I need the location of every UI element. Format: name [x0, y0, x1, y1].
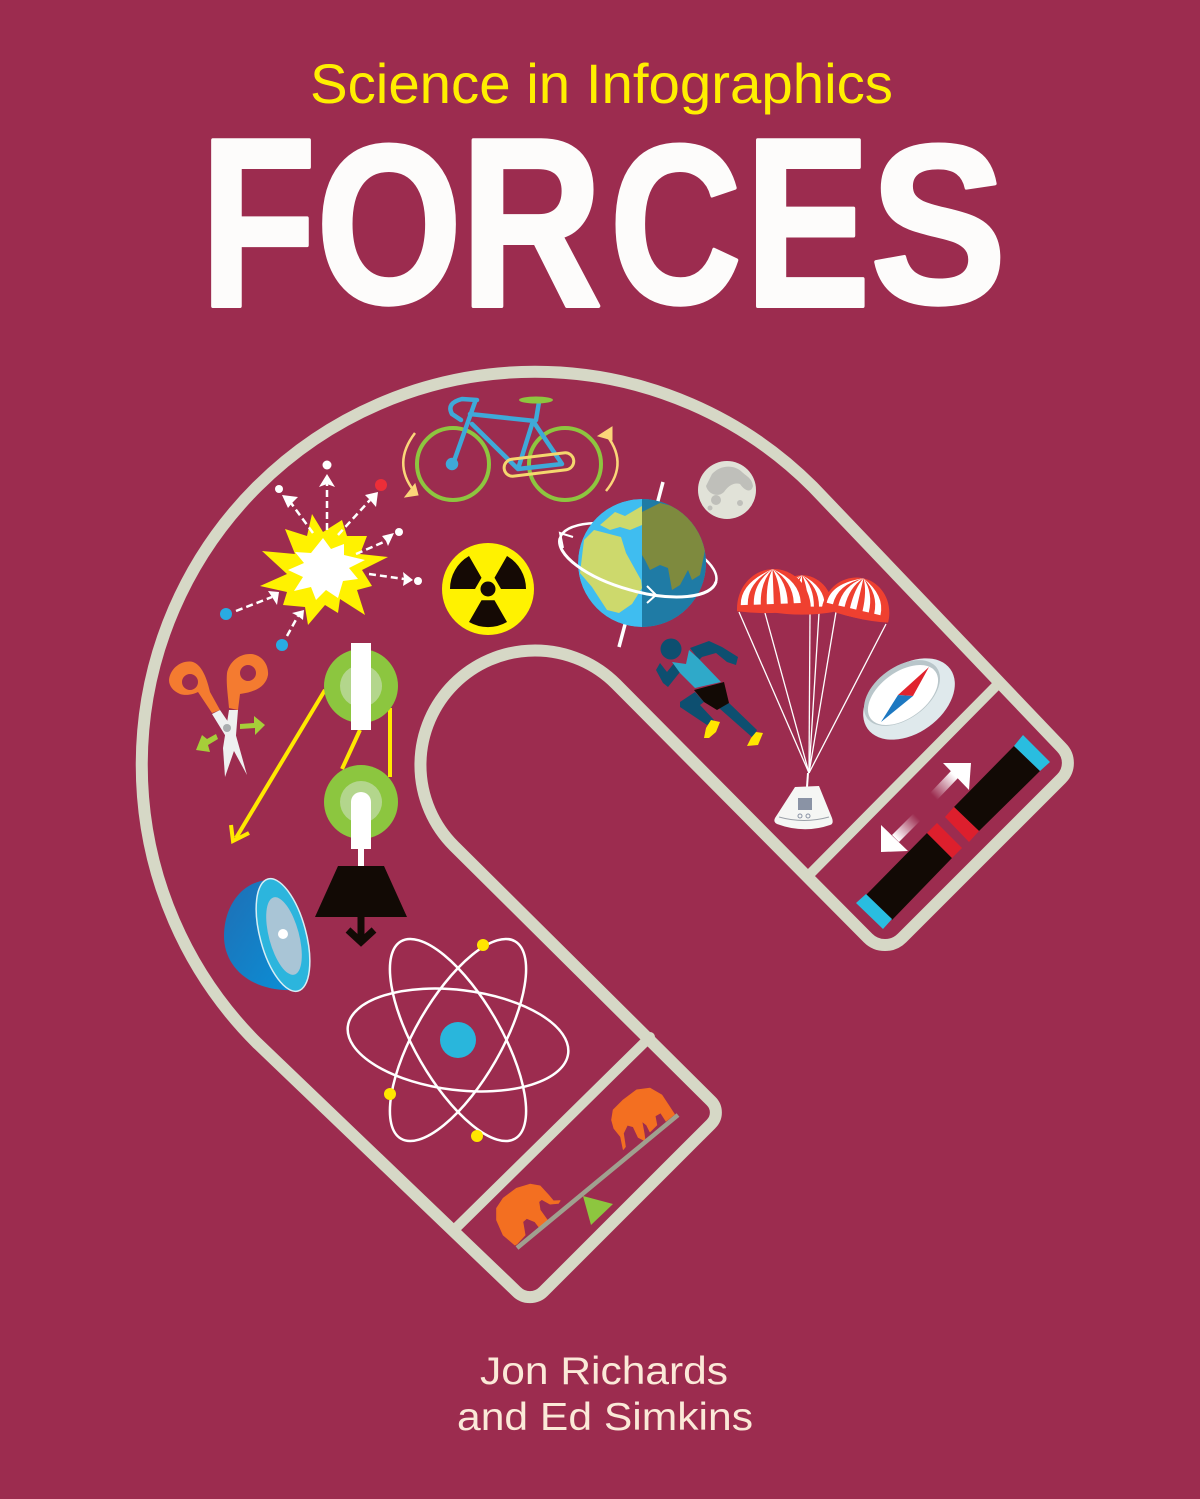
- nucleus: [440, 1022, 476, 1058]
- middle canopy: [775, 575, 834, 615]
- main title: R: [460, 88, 603, 357]
- main title: C: [610, 98, 742, 351]
- yellow burst: [260, 514, 388, 625]
- weight down arrow: [348, 917, 374, 942]
- rotation ring front: [552, 538, 716, 612]
- icon: sprinter: [656, 638, 763, 746]
- rotation ring back: [552, 508, 724, 612]
- repel arrow down: [881, 813, 921, 852]
- force arrows: [196, 716, 265, 752]
- upper pole tip: [1014, 735, 1050, 771]
- main title: O: [316, 99, 462, 352]
- icon: pulley system: [231, 643, 407, 942]
- right canopy: [822, 578, 890, 623]
- upper pulley hub: [340, 665, 382, 707]
- turning arrow right: [598, 427, 618, 491]
- icon: compass: [848, 642, 970, 756]
- rope: [231, 690, 390, 841]
- space capsule: [774, 786, 833, 829]
- icon: radiation symbol: [442, 543, 534, 635]
- left canopy: [737, 569, 811, 614]
- upper elephant: [612, 1088, 674, 1149]
- turning arrow left: [403, 433, 418, 497]
- authors: Jon Richards: [480, 1350, 728, 1393]
- lower pulley hub: [340, 781, 382, 823]
- electrons: [384, 939, 489, 1142]
- series title: Science in Infographics: [310, 52, 893, 115]
- main title: F: [200, 88, 316, 358]
- authors: and Ed Simkins: [457, 1396, 753, 1439]
- bicycle frame: [448, 399, 562, 469]
- compass body: [848, 642, 970, 756]
- runner shorts: [694, 682, 729, 710]
- rotation axis: [619, 482, 663, 647]
- arrow heads: [268, 474, 413, 620]
- icon: moon: [698, 461, 756, 519]
- bicycle chain: [503, 452, 575, 477]
- upper pulley bracket: [351, 643, 371, 730]
- seesaw beam: [517, 1115, 678, 1248]
- icon: parachutes and capsule: [737, 569, 890, 830]
- bicycle saddle: [519, 396, 553, 404]
- lower magnet half: [866, 833, 952, 920]
- compass dial: [857, 653, 949, 737]
- repel arrow up: [930, 763, 971, 800]
- earth: [578, 499, 706, 627]
- fulcrum: [583, 1196, 613, 1225]
- upper magnet half: [954, 746, 1040, 831]
- icon: scissors: [169, 654, 268, 777]
- runner shoes: [704, 720, 763, 746]
- scissor handles: [169, 654, 268, 713]
- compass face: [852, 647, 952, 739]
- lower pole tip: [856, 894, 892, 929]
- orbits: [342, 920, 574, 1160]
- lower elephant: [497, 1184, 560, 1245]
- icon: atom: [342, 920, 574, 1160]
- lower red band: [927, 823, 962, 858]
- weight: [315, 866, 407, 917]
- white burst: [288, 538, 365, 600]
- scissor pivot: [223, 724, 231, 732]
- compass needle: [881, 667, 929, 722]
- runner vest: [672, 650, 721, 688]
- authors: [457, 1350, 753, 1439]
- runner head and limbs: [656, 638, 757, 738]
- main title: S: [870, 97, 1007, 351]
- main title: E: [745, 87, 870, 357]
- upper red band: [945, 807, 979, 842]
- horseshoe magnet outline: [142, 372, 1068, 1297]
- icon: bar magnet with opposing poles: [856, 735, 1050, 929]
- icon: bicycle with chain and turning arrows: [403, 396, 618, 500]
- dashed particle arrows: [236, 484, 404, 636]
- scissor blades: [212, 710, 247, 777]
- lower pulley bracket: [351, 792, 371, 867]
- main title: [200, 87, 1007, 358]
- icon: balance with elephants: [497, 1088, 678, 1248]
- icon: globe with axis and moon orbit: [552, 482, 724, 647]
- parachute lines: [739, 612, 886, 787]
- bicycle wheels: [417, 428, 601, 500]
- upper pulley wheel: [324, 649, 398, 723]
- rotation arrow heads: [560, 533, 656, 603]
- icon: hemisphere of magnet field: [224, 873, 320, 997]
- lower pulley wheel: [324, 765, 398, 839]
- icon: nuclear fission explosion: [220, 460, 422, 651]
- particles: [220, 460, 422, 651]
